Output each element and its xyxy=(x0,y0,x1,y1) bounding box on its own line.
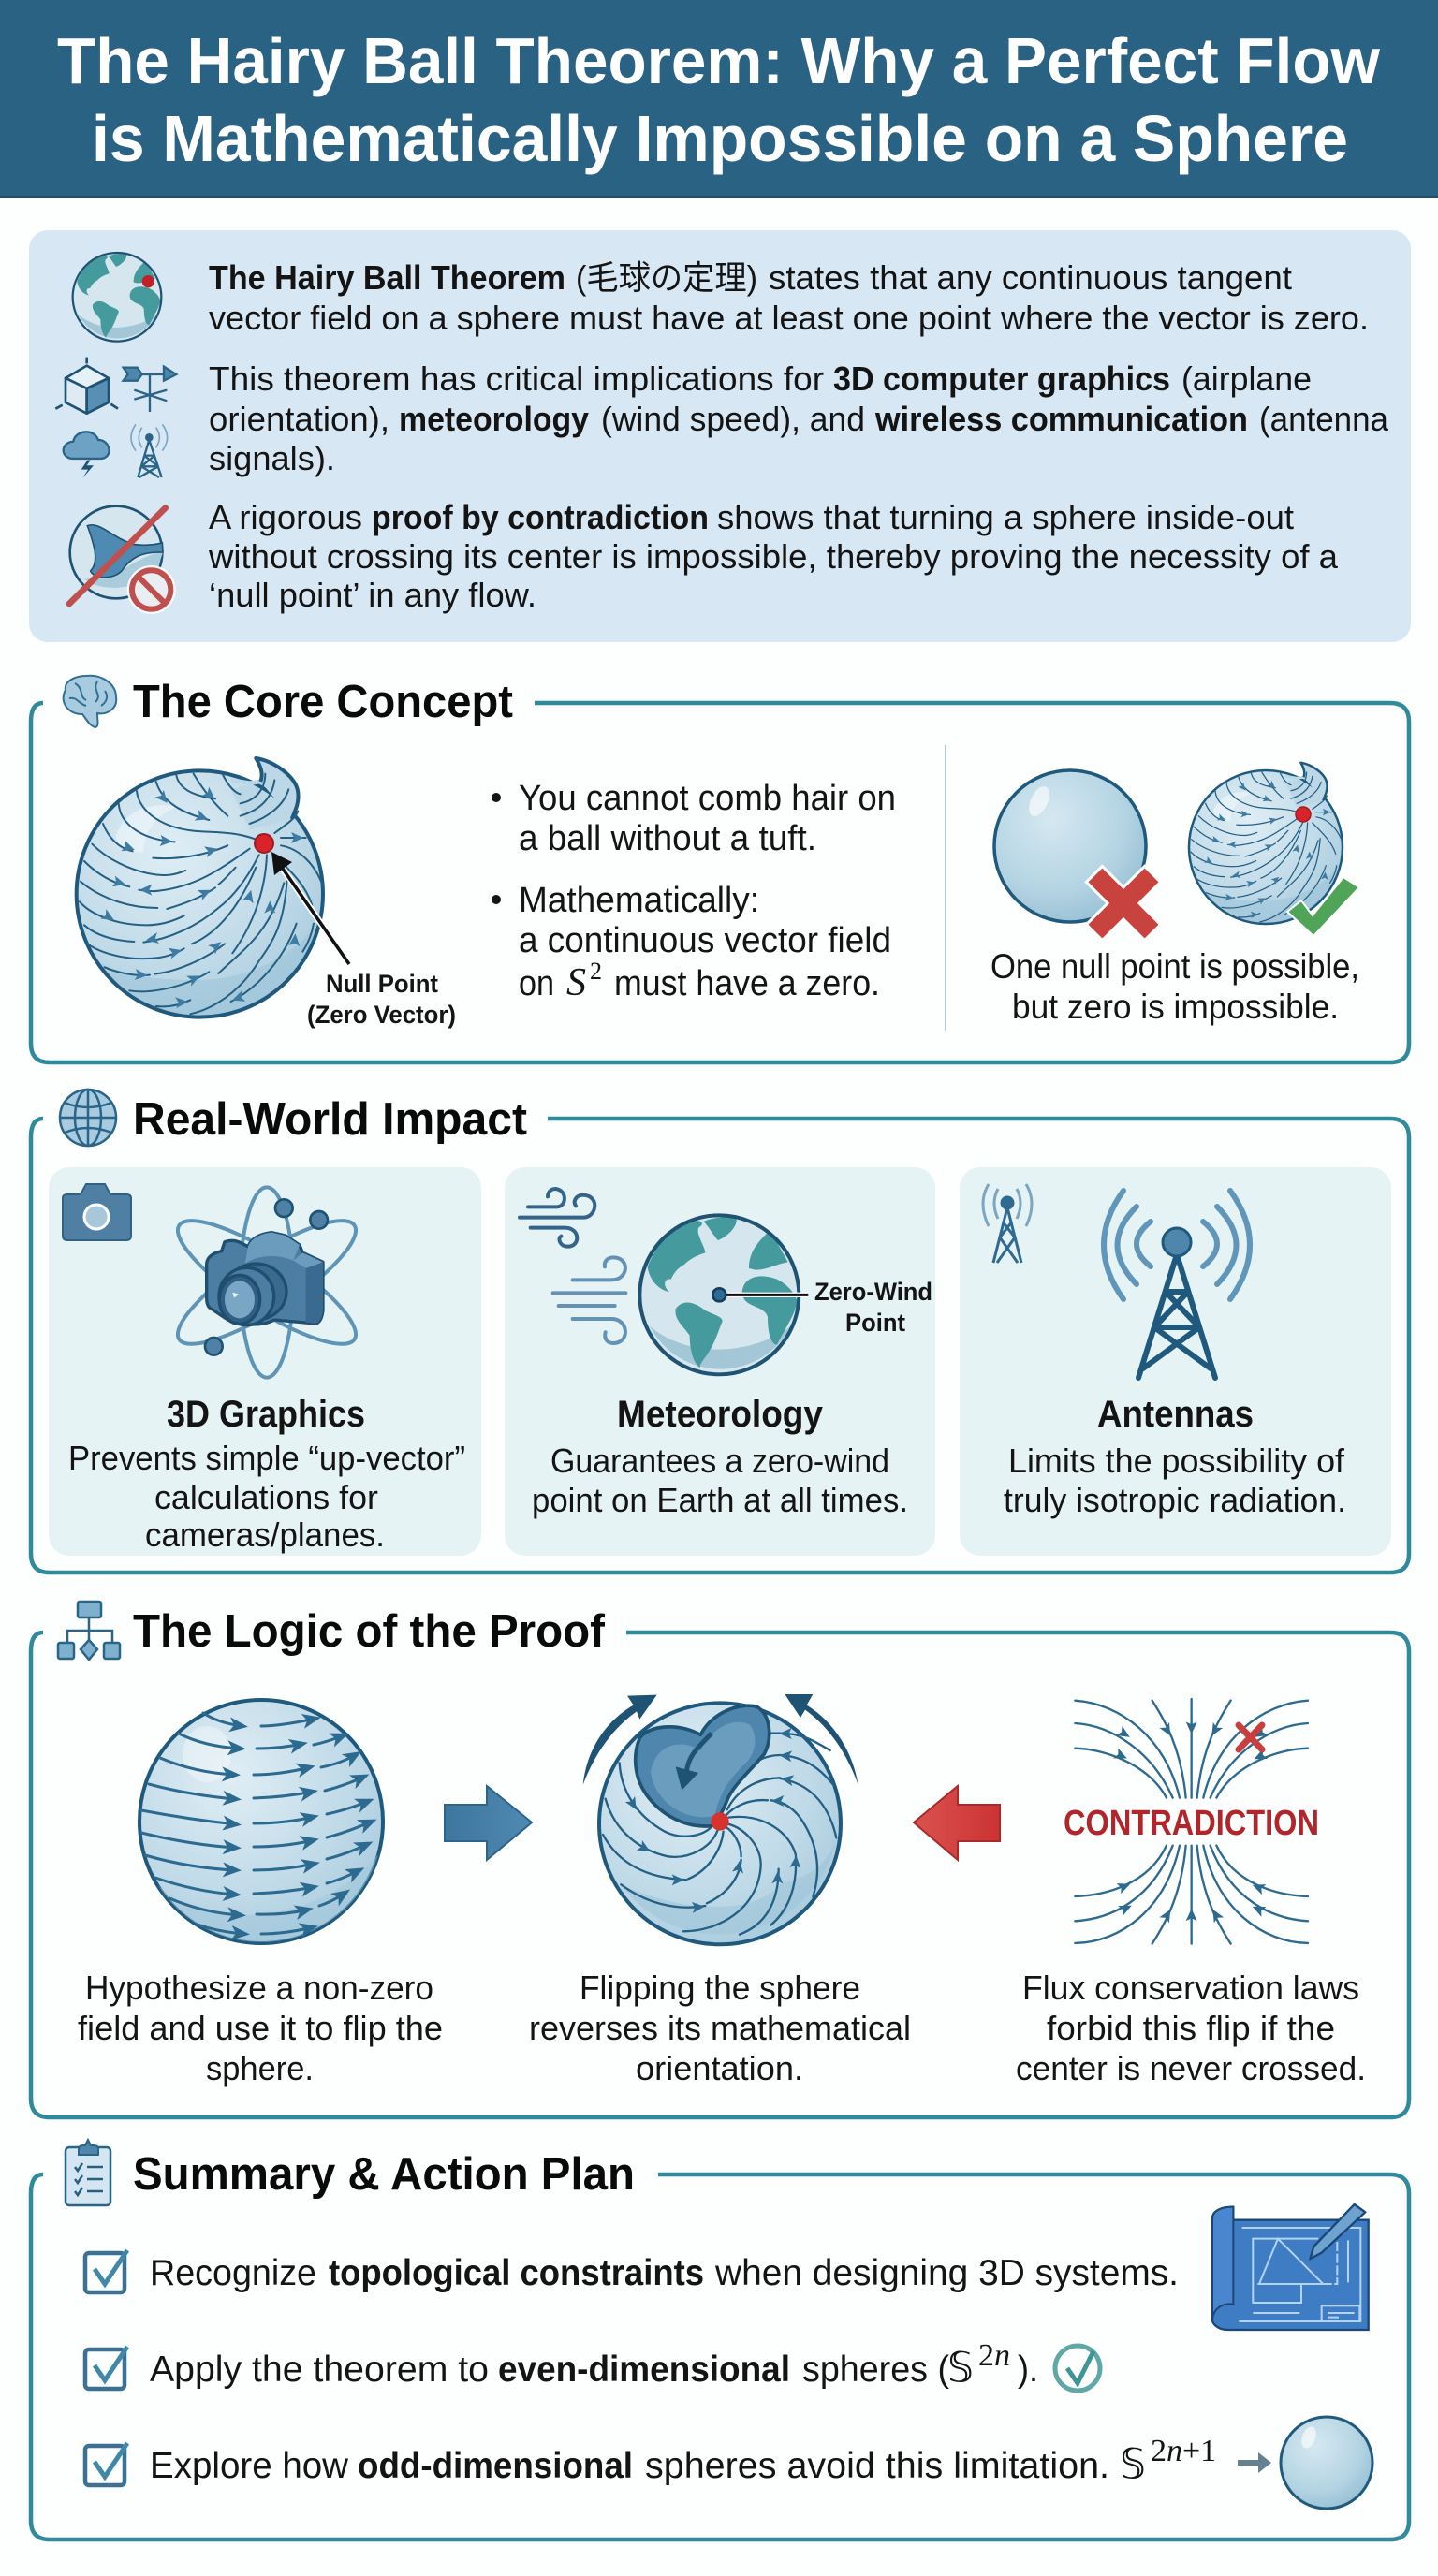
panel: real-world impact xyxy=(31,1090,1409,1573)
illustration: non-zero field sphere xyxy=(139,1700,383,1943)
bullet list: You cannot comb hair on xyxy=(519,779,896,818)
heading: Summary & Action Plan xyxy=(133,2149,635,2200)
header banner xyxy=(0,0,1438,198)
title: is Mathematically Impossible on a Sphere xyxy=(92,102,1348,175)
text: proof summary: proof by contradiction xyxy=(372,498,709,536)
label: null point: (Zero Vector) xyxy=(307,1001,456,1029)
label: null point xyxy=(307,970,456,1029)
action item three: 2n+1 xyxy=(1151,2434,1216,2468)
heading: Real-World Impact xyxy=(133,1094,527,1145)
action item one: topological constraints xyxy=(329,2253,704,2293)
text: meteorology: Meteorology xyxy=(617,1394,824,1435)
arrow: gray to sphere xyxy=(1238,2452,1271,2473)
icon: crossed-out flip sphere xyxy=(69,506,176,614)
text: step three xyxy=(1016,1969,1366,2087)
illustration: flux lines xyxy=(1075,1699,1308,1944)
panel: introduction xyxy=(29,230,1411,642)
bullet list xyxy=(492,779,896,1004)
arrow: red left xyxy=(914,1786,1000,1860)
action item two: Apply the theorem to xyxy=(150,2349,489,2390)
card: 3D graphics xyxy=(49,1167,481,1556)
label: zero-wind point xyxy=(814,1278,932,1337)
text: implications: (airplane xyxy=(1181,359,1312,398)
card: antennas xyxy=(960,1167,1391,1556)
text: implications xyxy=(209,359,1389,477)
action item three: 𝕊 xyxy=(1120,2440,1146,2488)
text: step three: Flux conservation laws xyxy=(1022,1969,1359,2007)
text: theorem statement: vector field on a sphere must have at least one point where the vector is zero. xyxy=(209,299,1369,337)
panel: the core concept xyxy=(31,676,1409,1062)
text: step one: sphere. xyxy=(206,2049,314,2087)
bullet list: S xyxy=(566,961,586,1004)
text: antennas xyxy=(1004,1394,1346,1519)
action item two: 𝕊 xyxy=(947,2344,974,2392)
illustration: flipping sphere xyxy=(583,1694,858,1944)
text: theorem statement: The Hairy Ball Theorem xyxy=(209,258,565,297)
text: step two xyxy=(529,1969,911,2087)
action item one: Recognize xyxy=(150,2253,316,2293)
icon: globe with red null point xyxy=(73,253,161,342)
icon: earth with zero-wind point xyxy=(639,1215,808,1374)
heading: The Core Concept xyxy=(133,677,513,727)
text: implications: (antenna xyxy=(1259,400,1389,438)
panel: the logic of the proof xyxy=(31,1602,1409,2117)
text: implications: (wind speed), and xyxy=(601,400,865,438)
icon: smooth sphere with red cross xyxy=(994,770,1181,961)
action item three: odd-dimensional xyxy=(358,2446,633,2486)
icons: cube, wind vane, cloud, tower xyxy=(55,358,176,478)
caption: but zero is impossible. xyxy=(1012,988,1339,1026)
icon: teal check circle xyxy=(1055,2346,1100,2391)
text: implications: This theorem has critical implications for xyxy=(209,359,824,398)
title: The Hairy Ball Theorem: Why a Perfect Flow xyxy=(57,24,1381,97)
bullet list: Mathematically: xyxy=(519,881,759,920)
text: implications: meteorology xyxy=(399,400,589,438)
icon: atom with camera xyxy=(164,1187,370,1378)
bullet list: a continuous vector field xyxy=(519,921,891,960)
action item two: ). xyxy=(1018,2349,1038,2390)
text: proof summary xyxy=(208,498,1339,614)
text: meteorology: point on Earth at all times. xyxy=(532,1481,908,1519)
text: 3D graphics xyxy=(68,1394,465,1554)
bullet list: must have a zero. xyxy=(614,964,880,1003)
illustration: combed sphere with null point xyxy=(77,758,349,1017)
bullet list: 2 xyxy=(590,958,602,985)
caption xyxy=(990,947,1359,1026)
text: step two: Flipping the sphere xyxy=(580,1969,860,2007)
icon: hierarchy xyxy=(58,1602,120,1660)
text: 3D graphics: Prevents simple “up-vector” xyxy=(68,1439,465,1477)
text: implications: 3D computer graphics xyxy=(833,359,1170,398)
action item three xyxy=(85,2434,1216,2488)
text: implications: signals). xyxy=(209,439,335,477)
action item three: Explore how xyxy=(150,2446,349,2486)
text: meteorology xyxy=(532,1394,908,1519)
icon: hairy sphere with green check xyxy=(1189,763,1359,936)
icon: clipboard xyxy=(66,2140,110,2205)
heading: The Logic of the Proof xyxy=(133,1606,606,1657)
text: step three: forbid this flip if the xyxy=(1047,2009,1335,2047)
card: meteorology xyxy=(505,1167,935,1556)
label: zero-wind point: Zero-Wind xyxy=(814,1278,932,1306)
action item two: 2n xyxy=(978,2338,1010,2373)
icon: small antenna xyxy=(983,1184,1032,1263)
text: proof summary: without crossing its center is impossible, thereby proving the necessity of a xyxy=(208,537,1339,576)
text: proof summary: A rigorous xyxy=(209,498,362,536)
panel: summary and action plan xyxy=(31,2140,1409,2539)
label: contradiction: CONTRADICTION xyxy=(1064,1804,1319,1843)
action item one: when designing 3D systems. xyxy=(714,2253,1179,2293)
icon: checkbox xyxy=(85,2250,127,2292)
icon: smooth sphere xyxy=(1281,2417,1372,2509)
label: null point: Null Point xyxy=(326,970,438,998)
bullet list: on xyxy=(519,964,554,1003)
icon: checkbox xyxy=(85,2443,127,2485)
text: antennas: Antennas xyxy=(1097,1394,1254,1435)
text: proof summary: ‘null point’ in any flow. xyxy=(209,576,536,614)
text: antennas: truly isotropic radiation. xyxy=(1004,1481,1346,1519)
text: step two: reverses its mathematical xyxy=(529,2009,911,2047)
text: step one xyxy=(78,1969,443,2087)
text: step two: orientation. xyxy=(636,2049,803,2087)
text: step three: center is never crossed. xyxy=(1016,2049,1366,2087)
action item three: spheres avoid this limitation. xyxy=(645,2446,1109,2486)
text: step one: field and use it to flip the xyxy=(78,2009,443,2047)
action item one xyxy=(85,2250,1179,2293)
text: 3D graphics: 3D Graphics xyxy=(167,1394,365,1435)
caption: One null point is possible, xyxy=(990,947,1359,986)
icon: small camera xyxy=(63,1184,131,1240)
bullet list: a ball without a tuft. xyxy=(519,819,816,858)
text: implications: orientation), xyxy=(209,400,389,438)
text: meteorology: Guarantees a zero-wind xyxy=(550,1442,889,1480)
text: implications: wireless communication xyxy=(874,400,1248,438)
icon: wind lines xyxy=(520,1189,625,1343)
icon: large antenna xyxy=(1104,1191,1250,1378)
label: zero-wind point: Point xyxy=(845,1309,905,1337)
title xyxy=(57,24,1381,175)
action item two: spheres ( xyxy=(802,2349,949,2390)
text: 3D graphics: cameras/planes. xyxy=(145,1515,385,1554)
text: antennas: Limits the possibility of xyxy=(1008,1442,1345,1480)
text: theorem statement: (毛球の定理) xyxy=(576,258,757,297)
text: 3D graphics: calculations for xyxy=(154,1478,378,1516)
text: theorem statement: states that any continuous tangent xyxy=(769,258,1292,297)
action item two: even-dimensional xyxy=(498,2349,790,2390)
action item two xyxy=(85,2338,1038,2392)
arrow: blue right xyxy=(445,1786,532,1860)
text: proof summary: shows that turning a sphere inside-out xyxy=(717,498,1294,536)
icon: blueprint with pencil xyxy=(1212,2204,1369,2330)
icon: checkbox xyxy=(85,2347,127,2389)
icon: red cross on flux xyxy=(1239,1725,1262,1749)
text: step one: Hypothesize a non-zero xyxy=(85,1969,433,2007)
icon: brain xyxy=(64,676,116,727)
text: theorem statement xyxy=(209,258,1369,337)
icon: grid globe xyxy=(60,1090,116,1146)
